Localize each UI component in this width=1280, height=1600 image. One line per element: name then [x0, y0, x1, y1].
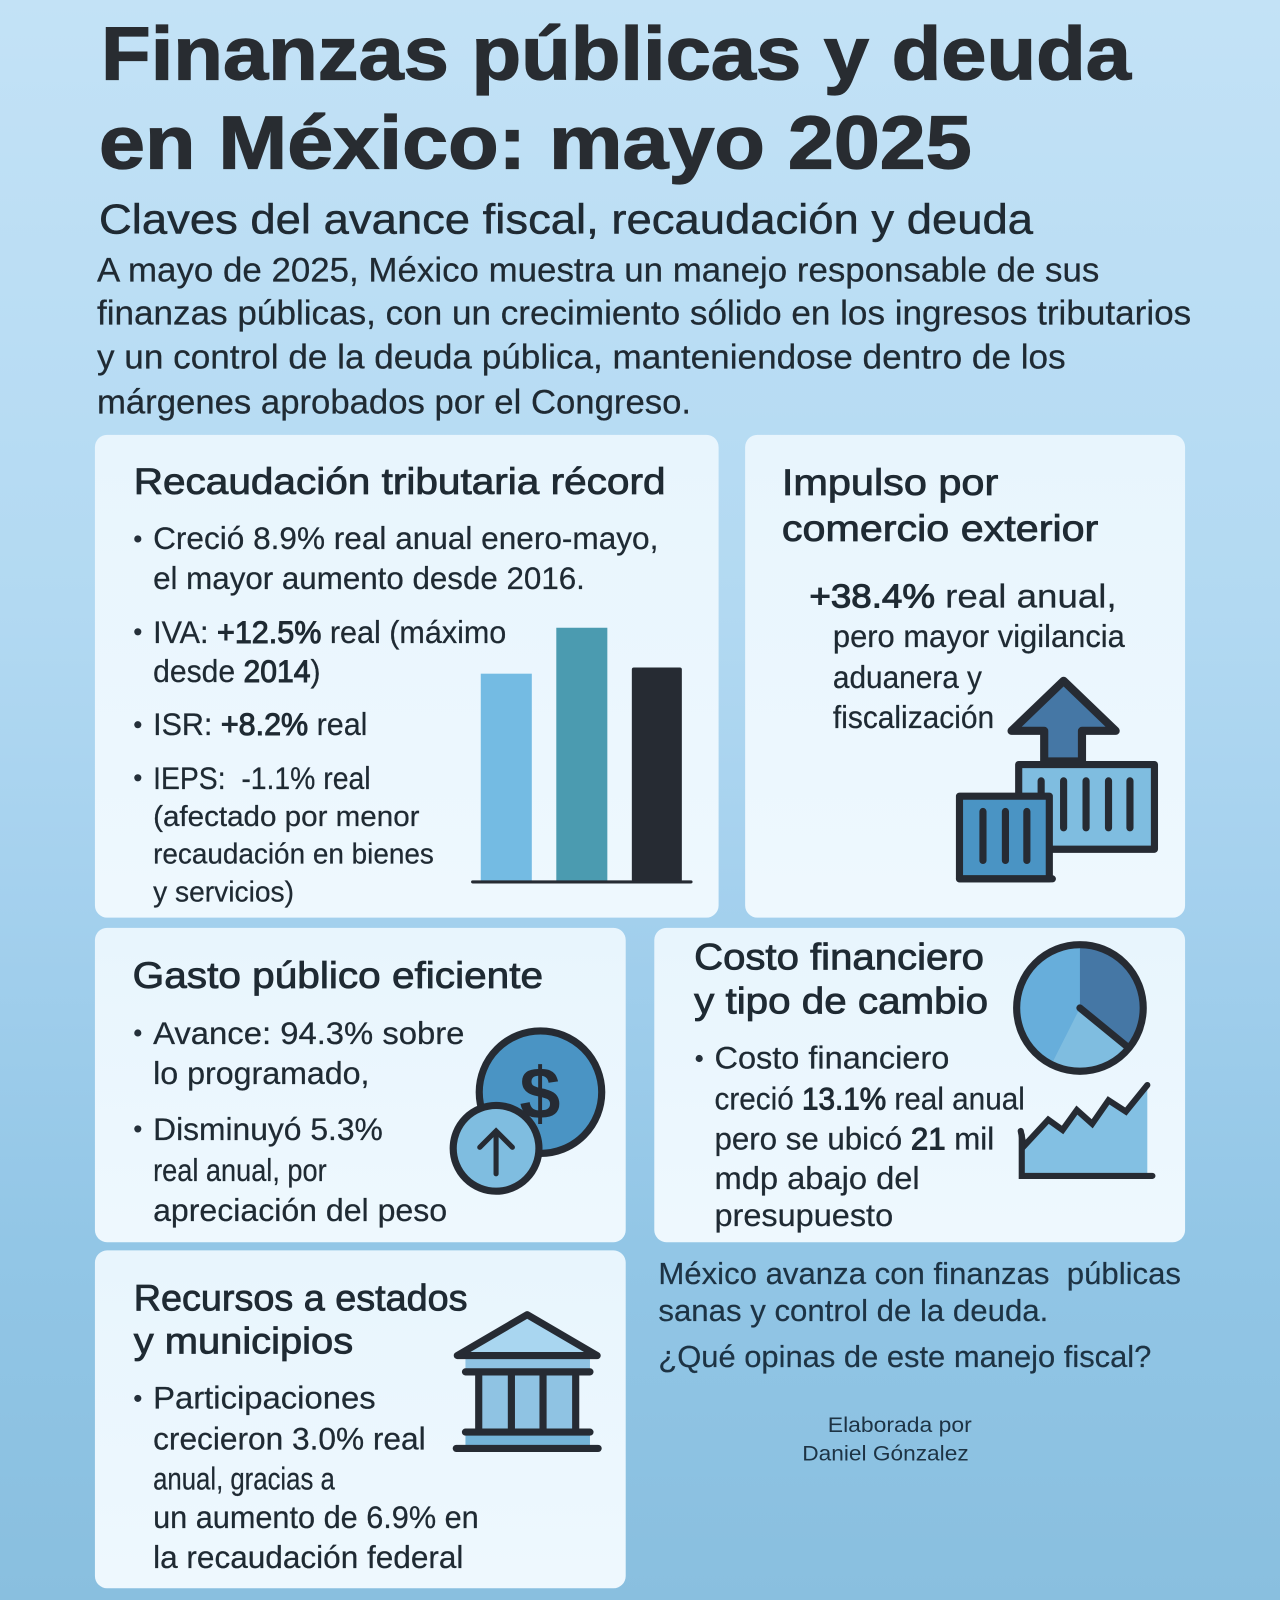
heading: recaudación: Recaudación tributaria récord — [134, 461, 666, 502]
bullet list: recaudación: recaudación en bienes — [153, 839, 434, 871]
bullet list: gasto — [134, 1015, 464, 1228]
panel: costo financiero y tipo de cambio — [654, 928, 1185, 1242]
bullet list: recursos: la recaudación federal — [153, 1539, 463, 1575]
intro text: y un control de la deuda pública, manteniendose dentro de los — [97, 338, 1066, 376]
bullet list: recaudación: IEPS: -1.1% real — [153, 760, 371, 796]
bullet list: costo: creció 13.1% real anual — [715, 1081, 1025, 1117]
intro text — [97, 252, 1191, 421]
heading: comercio exterior — [782, 462, 1098, 549]
panel: gasto público eficiente — [95, 928, 626, 1242]
closing message: sanas y control de la deuda. — [658, 1294, 1048, 1328]
bullet list: recursos: anual, gracias a — [153, 1460, 335, 1496]
icon: containers with up arrow — [959, 681, 1154, 879]
closing message — [658, 1257, 1181, 1374]
panel: impulso por comercio exterior — [745, 435, 1185, 918]
bar chart — [473, 628, 691, 882]
heading: costo — [694, 937, 988, 1022]
title — [99, 13, 1132, 185]
bullet list: recursos: Participaciones — [153, 1380, 376, 1416]
bullet list: recaudación: ISR: +8.2% real — [153, 706, 367, 742]
intro text: A mayo de 2025, México muestra un manejo responsable de sus — [97, 252, 1099, 290]
panel: recursos a estados y municipios — [95, 1250, 626, 1588]
bullet list: recaudación: el mayor aumento desde 2016. — [153, 560, 585, 596]
icon: coins: $ — [520, 1052, 560, 1135]
heading: costo: Costo financiero — [694, 937, 984, 978]
bullet list: costo: Costo financiero — [715, 1040, 949, 1076]
icon: line chart — [1021, 1085, 1152, 1176]
text: comercio exterior — [809, 578, 1125, 735]
icon: coins — [453, 1031, 602, 1191]
heading: recursos — [134, 1278, 467, 1361]
credit — [802, 1413, 972, 1466]
title: Finanzas públicas y deuda — [101, 13, 1132, 97]
heading: recursos: y municipios — [134, 1320, 353, 1361]
bullet list: recaudación: Creció 8.9% real anual enero-mayo, — [153, 520, 658, 556]
text: comercio exterior: pero mayor vigilancia — [833, 618, 1125, 654]
subtitle: Claves del avance fiscal, recaudación y deuda — [99, 196, 1034, 243]
bullet list: recursos: un aumento de 6.9% en — [153, 1499, 479, 1535]
heading: costo: y tipo de cambio — [694, 981, 988, 1022]
credit: Daniel Gónzalez — [802, 1442, 969, 1466]
bullet list: gasto: lo programado, — [153, 1055, 370, 1091]
bullet list: recaudación: y servicios) — [153, 876, 294, 908]
bullet list: recaudación: desde 2014) — [153, 653, 321, 689]
heading: gasto: Gasto público eficiente — [133, 955, 543, 996]
bullet list: costo: mdp abajo del — [715, 1160, 920, 1196]
title: en México: mayo 2025 — [99, 101, 972, 185]
closing message: ¿Qué opinas de este manejo fiscal? — [658, 1340, 1151, 1374]
text: comercio exterior: fiscalización — [833, 699, 994, 735]
bullet list: recaudación: (afectado por menor — [153, 801, 420, 833]
bullet list: recaudación: IVA: +12.5% real (máximo — [153, 614, 506, 650]
bullet list: gasto: real anual, por — [153, 1152, 327, 1188]
text: comercio exterior: +38.4% real anual, — [809, 578, 1117, 615]
bullet list: recursos: crecieron 3.0% real — [153, 1420, 426, 1456]
icon: pie chart — [1017, 945, 1143, 1071]
heading: comercio exterior: Impulso por — [782, 462, 998, 503]
text: comercio exterior: aduanera y — [833, 659, 982, 695]
bullet list: gasto: apreciación del peso — [153, 1192, 447, 1228]
intro text: márgenes aprobados por el Congreso. — [97, 383, 691, 421]
icon: government building — [456, 1315, 598, 1448]
bullet list: costo: presupuesto — [715, 1197, 893, 1233]
bullet list: costo — [696, 1040, 1025, 1233]
heading: recursos: Recursos a estados — [134, 1278, 467, 1319]
bullet list: recursos — [134, 1380, 479, 1575]
bullet list: gasto: Avance: 94.3% sobre — [153, 1015, 464, 1051]
credit: Elaborada por — [828, 1413, 972, 1437]
bullet list: gasto: Disminuyó 5.3% — [153, 1111, 383, 1147]
bullet list: costo: pero se ubicó 21 mil — [715, 1120, 994, 1156]
panel: recaudación tributaria récord — [95, 435, 719, 918]
heading: comercio exterior: comercio exterior — [782, 508, 1098, 549]
intro text: finanzas públicas, con un crecimiento sólido en los ingresos tributarios — [97, 295, 1191, 333]
closing message: México avanza con finanzas públicas — [658, 1257, 1181, 1291]
bullet list: recaudación — [134, 520, 658, 908]
